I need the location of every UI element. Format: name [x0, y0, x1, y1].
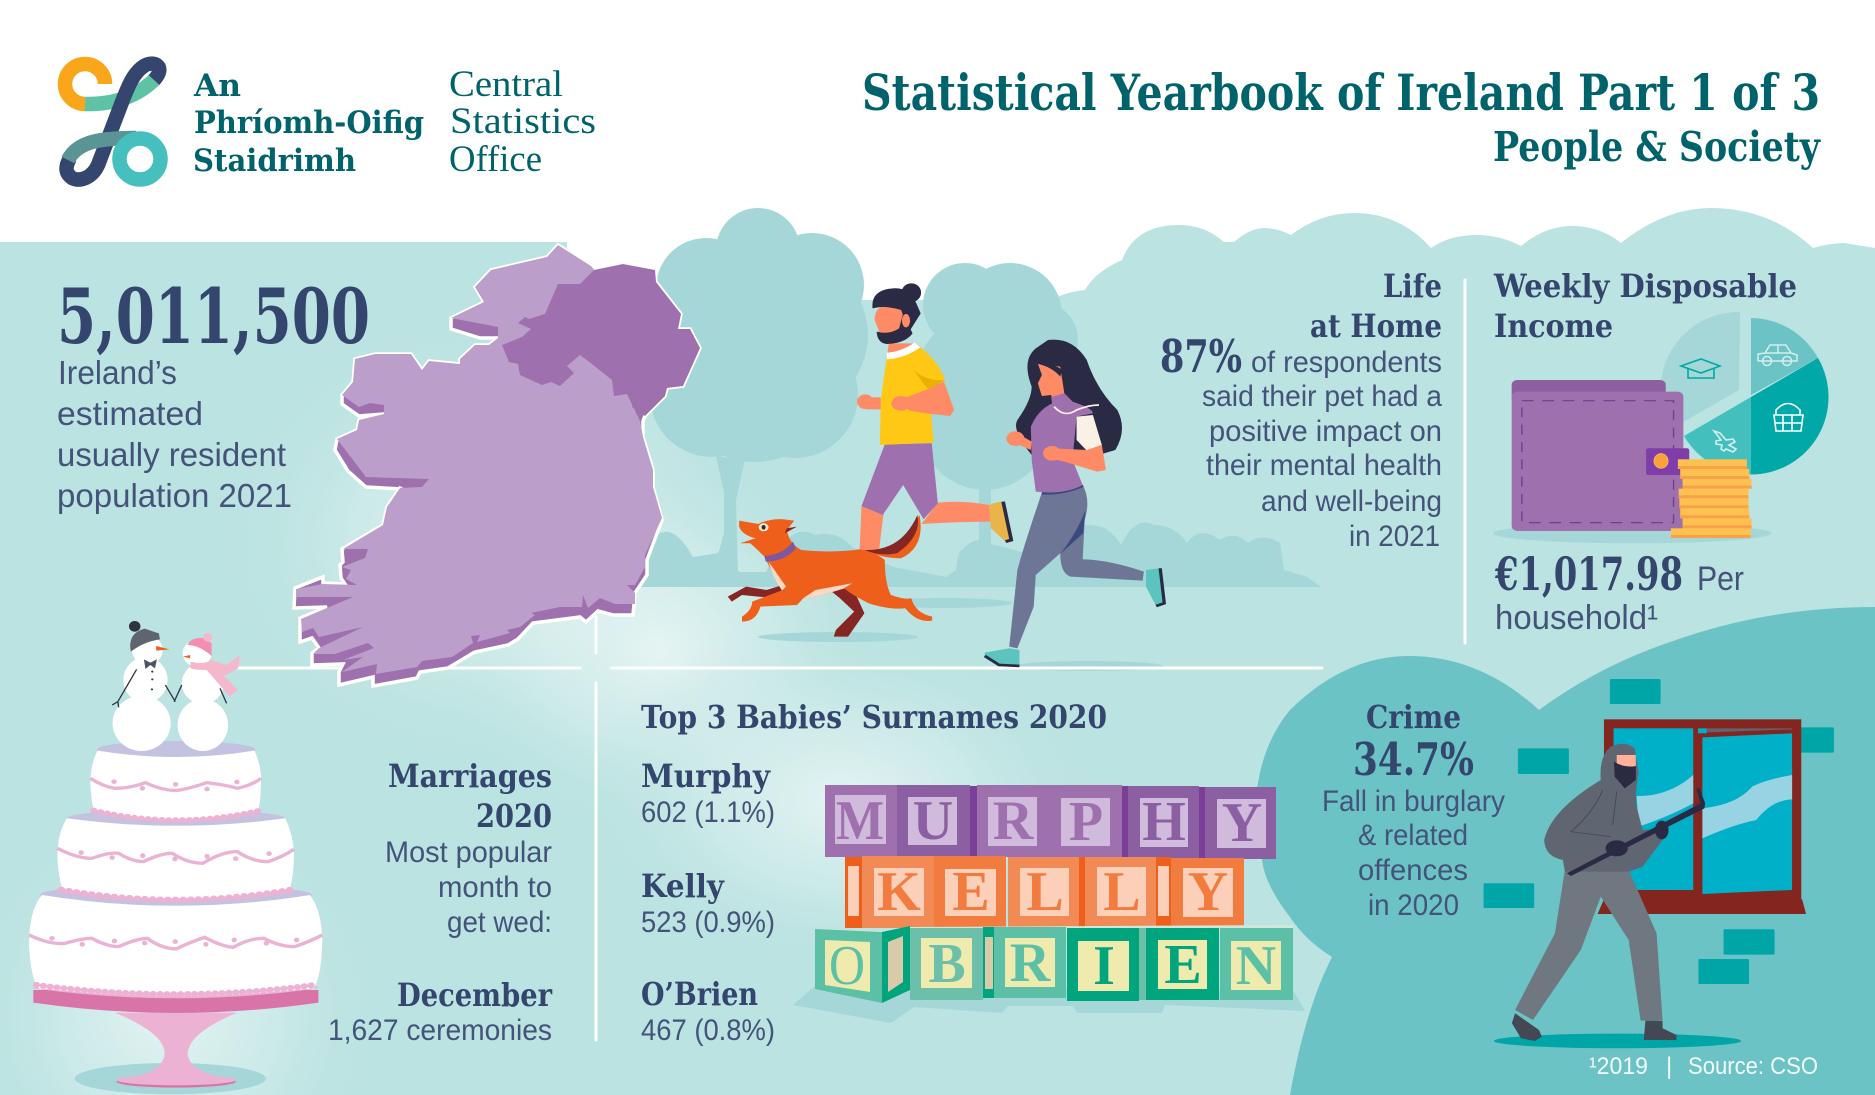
woman running — [985, 340, 1164, 666]
wedding cake — [29, 621, 322, 1094]
population text: Ireland’s — [58, 354, 177, 391]
source note — [1589, 1053, 1818, 1080]
ground shadows — [758, 598, 1163, 671]
logo text: English — [449, 64, 596, 180]
logo — [65, 64, 596, 180]
row: Murphy: U — [913, 790, 953, 852]
row: O'Brien: R — [1010, 932, 1051, 994]
title — [862, 63, 1821, 171]
population text — [57, 272, 370, 514]
icon: basket — [1774, 404, 1803, 431]
joggers and dog — [728, 283, 1164, 666]
row: Kelly: L — [1026, 861, 1064, 923]
weekly income heading: Income — [1494, 307, 1613, 345]
marriages text: Most popular — [385, 836, 552, 869]
weekly income heading — [1493, 267, 1797, 345]
icing dots — [49, 779, 299, 947]
row: O'Brien: I — [1093, 935, 1115, 997]
wallet — [1512, 380, 1689, 531]
icon: plane — [1714, 431, 1736, 452]
pie chart — [1661, 312, 1829, 474]
life at home text: their mental health — [1206, 449, 1442, 482]
source note: ¹2019 — [1589, 1053, 1648, 1080]
icon: car — [1758, 345, 1797, 366]
income figure: household¹ — [1495, 599, 1658, 637]
row: Murphy: Y — [1222, 792, 1262, 854]
marriages text: December — [397, 976, 553, 1014]
surnames text: 467 (0.8%) — [641, 1014, 775, 1047]
map of Ireland — [294, 245, 700, 686]
row: O'Brien: O — [829, 935, 865, 997]
map: island extrusion and outline — [294, 245, 700, 686]
row: Kelly — [845, 856, 1244, 928]
logo mark — [65, 64, 160, 180]
cake tiers — [29, 741, 322, 996]
row: Murphy — [825, 785, 1276, 859]
snowman groom — [112, 621, 175, 751]
life at home text: Life — [1383, 267, 1442, 305]
crime text: & related — [1358, 819, 1468, 852]
park scene: trees and bushes — [640, 208, 1321, 671]
life at home text: of respondents — [1251, 346, 1442, 379]
man running — [857, 283, 1011, 553]
logo text: English: Office — [449, 139, 542, 180]
source note: | — [1666, 1053, 1672, 1080]
window — [1598, 719, 1806, 914]
map: Republic of Ireland — [296, 245, 662, 674]
surnames text — [641, 698, 1107, 1047]
population text: usually resident — [57, 436, 286, 473]
row: Murphy: M — [836, 790, 884, 852]
subtitle: People & Society — [1493, 123, 1821, 171]
crime text — [1322, 698, 1505, 922]
name blocks — [793, 785, 1305, 1023]
wallet and coins — [1493, 380, 1772, 543]
marriages text: month to — [438, 871, 552, 904]
row: Murphy: R — [993, 790, 1034, 852]
snowman bride — [174, 633, 240, 751]
population text: estimated — [57, 395, 203, 432]
surnames text: 602 (1.1%) — [641, 796, 775, 829]
logo text: Irish: Staidrimh — [193, 143, 356, 179]
bricks — [1484, 679, 1834, 984]
row: O'Brien: N — [1236, 935, 1276, 997]
surnames text: Murphy — [641, 757, 771, 795]
logo text: English: Central — [449, 64, 563, 105]
income figure: Per — [1697, 560, 1744, 598]
burglar scene — [1484, 679, 1834, 1048]
surnames text: Top 3 Babies’ Surnames 2020 — [641, 698, 1107, 736]
crime text: offences — [1358, 854, 1468, 887]
coins — [1671, 459, 1752, 538]
life at home text: positive impact on — [1209, 415, 1442, 448]
row: O'Brien — [815, 925, 1293, 1003]
life at home text: at Home — [1310, 307, 1442, 345]
surnames text: O’Brien — [641, 975, 758, 1013]
marriages text: Marriages — [388, 757, 552, 795]
row: Kelly: E — [952, 861, 990, 923]
marriages text: get wed: — [447, 906, 552, 939]
logo text: Irish: An — [193, 68, 241, 104]
population text: population 2021 — [57, 477, 292, 514]
row: Kelly: L — [1103, 861, 1141, 923]
logo text: Irish: Phríomh-Oifig — [194, 105, 424, 141]
row: Murphy: H — [1142, 791, 1186, 853]
life at home text: in 2021 — [1349, 520, 1440, 553]
life at home text: said their pet had a — [1202, 380, 1442, 413]
tree: small — [910, 263, 1078, 550]
icon: graduation cap — [1681, 359, 1720, 378]
life at home text — [1160, 267, 1442, 553]
cake stand — [33, 983, 318, 1088]
population text: 5,011,500 — [57, 272, 370, 361]
crime text: Fall in burglary — [1322, 785, 1505, 818]
logo text: English: Statistics — [450, 101, 596, 142]
row: Murphy: P — [1069, 791, 1103, 853]
map: Northern Ireland — [502, 264, 700, 416]
logo text: Irish — [193, 68, 424, 179]
life at home text: and well-being — [1261, 485, 1442, 518]
crime text: in 2020 — [1368, 889, 1459, 922]
burglar — [1512, 744, 1705, 1041]
weekly income heading: Weekly Disposable — [1493, 267, 1797, 305]
row: O'Brien: B — [928, 933, 966, 995]
income figure — [1494, 547, 1744, 637]
row: Kelly: K — [877, 861, 921, 923]
crime text: 34.7% — [1353, 733, 1474, 786]
source note: Source: CSO — [1688, 1053, 1818, 1080]
marriages text: 2020 — [476, 797, 552, 835]
row: O'Brien: E — [1164, 934, 1202, 996]
income figure: €1,017.98 — [1494, 547, 1683, 601]
dog — [728, 515, 932, 637]
crime text: Crime — [1366, 698, 1461, 736]
divider lines — [237, 280, 1465, 1040]
bushes — [640, 522, 1321, 587]
blocks shadow — [793, 985, 1305, 1023]
row: Kelly: Y — [1188, 861, 1228, 923]
marriages text — [328, 757, 553, 1047]
tree: large — [650, 208, 868, 572]
surnames text: Kelly — [641, 867, 725, 905]
icing — [29, 778, 322, 994]
surnames text: 523 (0.9%) — [641, 906, 775, 939]
marriages text: 1,627 ceremonies — [328, 1014, 552, 1047]
life at home text: 87% — [1160, 330, 1242, 383]
crime panel background — [1255, 607, 1875, 1095]
